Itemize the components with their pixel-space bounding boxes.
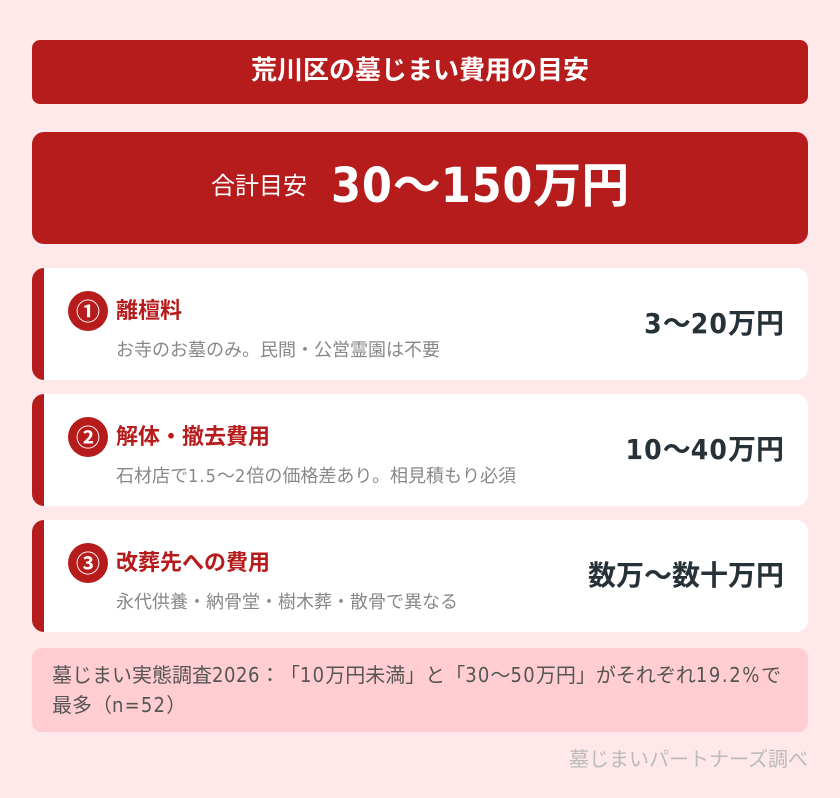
title	[32, 40, 808, 104]
item 2 price: 10〜40万円	[625, 433, 784, 466]
badge 2: ②	[76, 418, 100, 453]
item 2 name: 解体・撤去費用	[116, 425, 270, 450]
source credit: 墓じまいパートナーズ調べ	[569, 747, 808, 771]
item 3 description: 永代供養・納骨堂・樹木葬・散骨で異なる	[116, 592, 458, 613]
item 2 description: 石材店で1.5〜2倍の価格差あり。相見積もり必須	[116, 466, 516, 487]
item 3 price: 数万〜数十万円	[588, 559, 784, 592]
item 1 name: 離檀料	[116, 299, 182, 324]
total label: 合計目安	[211, 172, 307, 200]
badge 2	[68, 417, 108, 457]
item 1 description: お寺のお墓のみ。民間・公営霊園は不要	[116, 340, 440, 361]
callout: survey note: 墓じまい実態調査2026：「10万円未満」と「30〜50万円」がそれぞれ19.2%で	[52, 663, 781, 687]
callout: survey note	[32, 648, 808, 732]
item 3 name: 改葬先への費用	[116, 551, 270, 576]
badge 3	[68, 543, 108, 583]
title: 荒川区の墓じまい費用の目安	[251, 56, 589, 86]
badge 1	[68, 291, 108, 331]
item 1 price: 3〜20万円	[644, 307, 784, 340]
panel: item 2	[32, 394, 808, 506]
badge 1: ①	[76, 292, 100, 327]
panel: item 1	[32, 268, 808, 380]
total value: 30〜150万円	[331, 158, 629, 214]
panel: item 3	[32, 520, 808, 632]
badge 3: ③	[76, 544, 100, 579]
callout: survey note: 最多（n=52）	[52, 693, 186, 717]
panel: total estimate	[32, 132, 808, 244]
